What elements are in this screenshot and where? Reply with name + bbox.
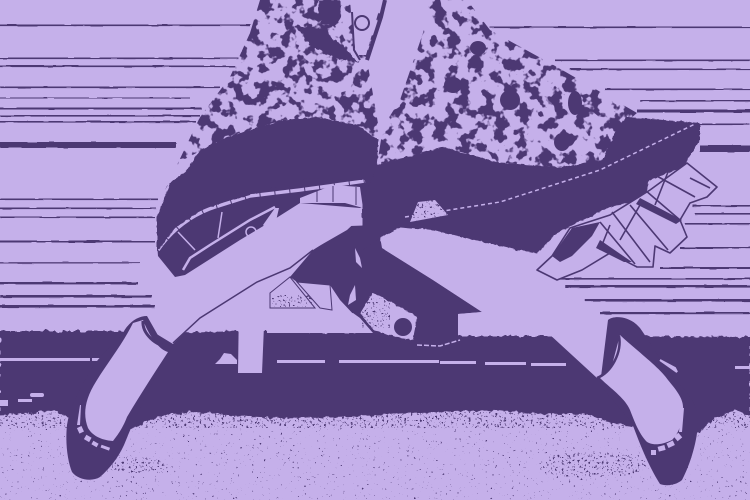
left shoe trim dots	[77, 405, 110, 451]
light strips inside the dark band	[0, 353, 750, 406]
bench seat segment left of the shadow	[267, 310, 373, 333]
right leg	[380, 228, 618, 378]
right skirt hem stitching and lace patch	[405, 124, 695, 222]
left leg	[150, 204, 363, 344]
bench seat segment right of the shadow	[458, 312, 548, 335]
bench slats: right side	[490, 26, 750, 314]
left leg lower outline	[173, 250, 313, 343]
bench slats: left side	[0, 24, 250, 308]
bench post	[238, 302, 265, 373]
dark shadow below the bench between the legs	[290, 225, 482, 346]
ground speckle	[0, 410, 750, 500]
lace hem patch in the shadow	[360, 293, 460, 346]
dark under-bench band	[0, 331, 750, 432]
left ankle strap	[143, 321, 170, 347]
left skirt floral fabric	[165, 0, 385, 190]
left foot	[85, 320, 168, 441]
left shoe	[66, 316, 168, 480]
tulle petticoat ruffles	[537, 163, 717, 280]
right foot	[600, 335, 683, 444]
petticoat under the left leg	[270, 248, 362, 310]
right shoe details	[651, 360, 684, 455]
right shoe	[600, 317, 698, 485]
left skirt lining	[157, 175, 378, 277]
pale top strip with handbag strap and ring	[350, 0, 385, 60]
right skirt dark hem band	[362, 117, 700, 253]
left skirt dark hem band	[157, 117, 378, 252]
right ankle strap	[597, 336, 620, 378]
right skirt floral fabric	[377, 0, 637, 167]
